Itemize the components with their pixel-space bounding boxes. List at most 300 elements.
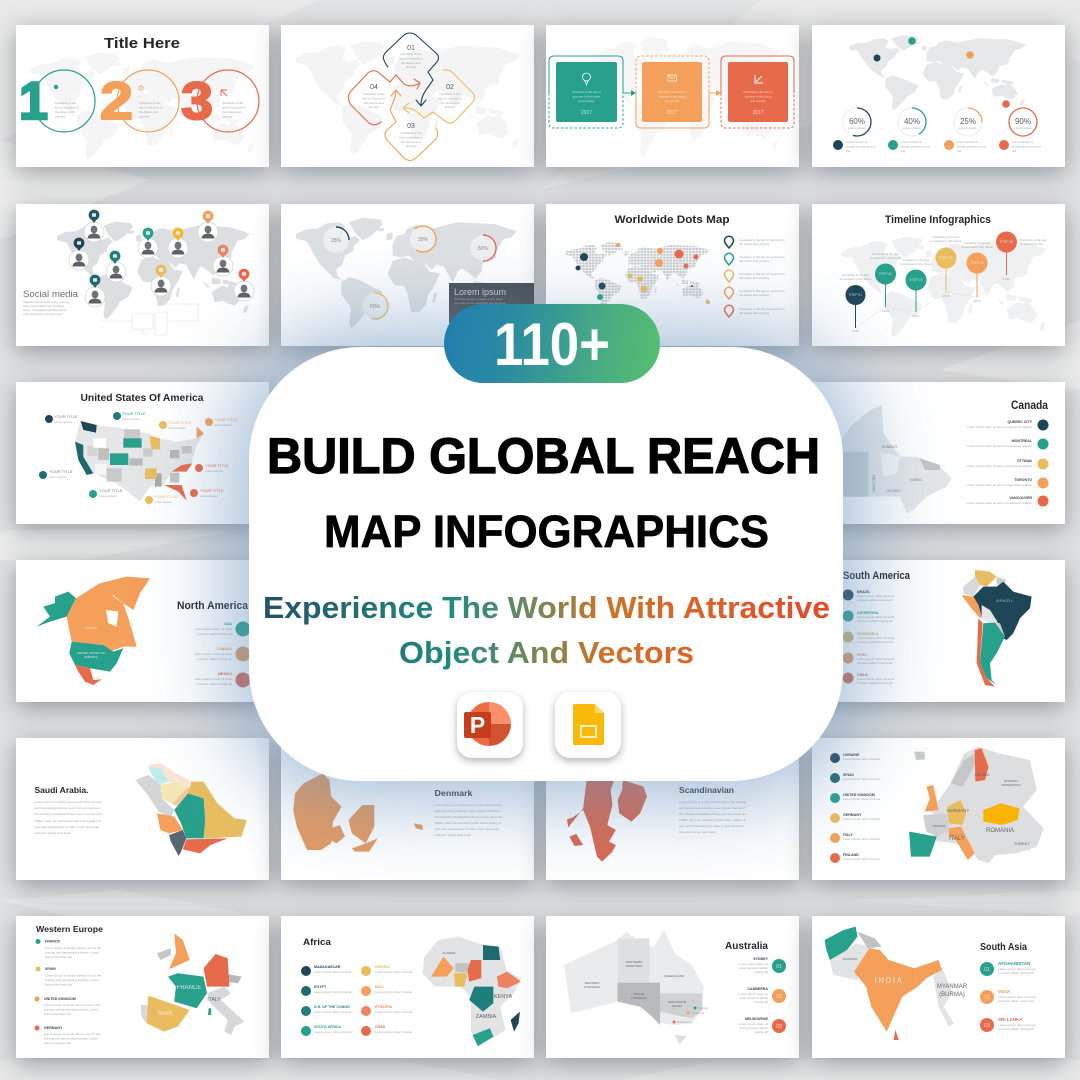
state callouts: Lorem ipsum	[99, 494, 117, 498]
list: Lorem ipsum dolor sit amet	[857, 636, 894, 640]
panel: four step diamond cycle	[281, 25, 534, 167]
diamond labels: the future and	[440, 101, 460, 105]
city list: MONTREAL	[1012, 439, 1033, 443]
box 1 teal	[549, 56, 636, 128]
state callouts: YOUR TITLE	[122, 411, 146, 416]
box 1 teal: 2017	[581, 110, 592, 116]
map labels	[872, 445, 924, 493]
diamond labels: primary	[406, 144, 417, 148]
country list: Lorem ipsum dolor sit amet	[314, 1010, 351, 1014]
body text: and typesetting industry. Lorem Ipsum has been	[434, 809, 501, 813]
city list: Lorem ipsum dolor sit	[738, 992, 768, 996]
map labels: NORTHERN	[626, 960, 642, 964]
panel: map with circular stats	[281, 204, 534, 346]
country list: UNITED KINGDOM	[843, 793, 875, 797]
balloon markers: to success in the future	[900, 262, 932, 266]
country list: Lorem ipsum dolor sit amet	[843, 797, 880, 801]
diamond labels	[362, 45, 462, 148]
diamond 03	[385, 90, 438, 160]
country list: AFGHANISTAN	[998, 961, 1030, 966]
box 3 red	[721, 56, 794, 128]
state callouts: Lorem ipsum	[154, 500, 172, 504]
balloon markers: to success in the future	[961, 245, 993, 249]
state callouts: Lorem ipsum	[122, 417, 140, 421]
ring 30 percent	[405, 221, 441, 257]
country list: Lorem ipsum dolor sit amet	[843, 837, 880, 841]
map labels	[442, 951, 512, 1020]
map labels: SOUTH	[634, 992, 644, 996]
list: BRAZIL	[857, 590, 871, 594]
list: consetur adipis mising elit	[857, 681, 893, 685]
city list: TORONTO	[1014, 478, 1032, 482]
body text: Lorem Ipsum is simply dummy text of the printing	[679, 800, 747, 804]
social media text: a as vincenda eros sunt quis	[23, 312, 63, 316]
country list: Lorem ipsum dolor sit amet,	[998, 967, 1036, 971]
list: consetur adipis mising elit	[197, 682, 232, 686]
balloon markers: Creativity is the key	[903, 258, 930, 262]
body text	[34, 800, 103, 835]
body text: unknown printer took book	[34, 831, 71, 835]
map labels: CANADA	[85, 626, 97, 630]
legend row: the	[846, 149, 851, 153]
diamond labels: Creativity is the	[439, 92, 461, 96]
map labels: MYANMAR	[937, 984, 968, 990]
subtitle line 2: Object And Vectors	[399, 635, 694, 670]
panel: social media map	[16, 204, 269, 346]
map labels: AMERICA	[84, 655, 98, 659]
map labels: QUEENSLAND	[664, 974, 685, 978]
legend row: Lorem ipsum is	[1012, 140, 1033, 144]
map labels	[584, 960, 686, 1008]
country list: ITALY	[843, 833, 853, 837]
map labels: ROMANIA	[986, 828, 1014, 834]
heading: western europe: Western Europe	[36, 924, 103, 934]
legend row: the	[901, 149, 906, 153]
city list: Lorem ipsum dolor sit amet, consectetur adipisc	[966, 464, 1032, 468]
state callouts: Lorem ipsum	[200, 494, 218, 498]
city list: 02	[776, 994, 782, 1000]
country list: Lorem ipsum dolor sit amet	[375, 1030, 412, 1034]
body text: unknown printer took book	[434, 833, 471, 837]
balloon markers: to success in the	[1020, 242, 1043, 246]
heading: africa: Africa	[303, 937, 332, 948]
step 1: the future and	[55, 110, 74, 114]
legend row: Lorem ipsum is	[846, 140, 867, 144]
city list: Lorem ipsum dolor sit amet, consectetur adipisc	[966, 483, 1032, 487]
panel: three year process boxes	[546, 25, 799, 167]
body text: type and scrambled it to make a type specimen	[34, 825, 99, 829]
dark callout box: Lorem ipsum	[454, 287, 506, 297]
panel: australia	[546, 916, 799, 1058]
map labels: PAKISTAN	[843, 957, 857, 961]
diamond labels: key to success in	[399, 136, 423, 140]
map labels: NEW SOUTH	[668, 1000, 686, 1004]
list: GERMANY	[44, 1026, 63, 1030]
step 2	[100, 70, 179, 132]
legend row: Lorem ipsum is	[901, 140, 922, 144]
step 2: primary	[139, 114, 150, 118]
ring 40 percent	[898, 108, 926, 136]
social media text: amet, consequam adipiscing ex	[23, 308, 67, 312]
list: consetur adipis mising elit	[197, 632, 232, 636]
list: consetur adipis mising elit	[857, 619, 893, 623]
country list: Lorem ipsum dolor sit amet	[314, 990, 351, 994]
list: Ipsum has been the	[44, 1041, 71, 1045]
ring 25 percent	[323, 227, 349, 253]
panel: africa	[281, 916, 534, 1058]
country list: UKRAINE	[843, 753, 860, 757]
list	[195, 622, 250, 688]
legend row: simply dummy text of	[957, 144, 986, 148]
country list: SOUTH AFRICA	[314, 1025, 341, 1029]
city list: mising elit	[754, 1000, 768, 1004]
balloon markers: Creativity is the key	[842, 273, 869, 277]
coloured map bubbles	[576, 243, 710, 304]
step 2: key to success in	[139, 106, 163, 110]
country list	[301, 965, 412, 1036]
body text: unknown printer took book	[679, 830, 716, 834]
connector line	[855, 275, 1007, 328]
icon: google slides	[555, 692, 621, 758]
balloon markers: STEP 04	[939, 256, 953, 260]
country list: D.R. OF THE CONGO	[314, 1005, 350, 1009]
country list: FINLAND	[843, 853, 859, 857]
social pins and avatars	[69, 210, 254, 307]
state callouts: Lorem ipsum	[214, 423, 232, 427]
diamond 04	[348, 71, 420, 125]
heading: australia: Australia	[725, 941, 768, 952]
scandinavia map	[567, 780, 647, 862]
balloon markers: Creativity is the key	[964, 241, 991, 245]
body text: the industry's standard dummy text ever since the	[434, 815, 503, 819]
dark callout box: you want to be, anywhere and anytime	[454, 301, 506, 305]
country list: Lorem ipsum dolor sit amet	[314, 1030, 351, 1034]
map labels: TURKEY	[1014, 841, 1030, 846]
map labels: GERMANY	[947, 808, 969, 813]
city list: Lorem ipsum dolor sit	[738, 1022, 768, 1026]
heading: south asia: South Asia	[980, 942, 1027, 953]
box 2 orange	[636, 56, 721, 128]
list: Lorem ipsum dolor sit amet	[195, 677, 232, 681]
denmark map	[293, 773, 423, 852]
state callouts: Lorem ipsum	[168, 426, 186, 430]
state callouts: YOUR TITLE	[214, 417, 238, 422]
box 2 orange: Creativity is the key to	[657, 90, 687, 94]
ring 90 percent: 90%	[1015, 117, 1031, 126]
country list: GERMANY	[843, 813, 862, 817]
panel: south asia	[812, 916, 1065, 1058]
list: Lorem Ipsum is simply dummy text of the	[45, 946, 102, 950]
map labels: WALES	[672, 1004, 682, 1008]
diamond labels: key to success in	[438, 96, 462, 100]
ring 30 percent: 30%	[418, 237, 429, 243]
pin legend: the future and primary	[739, 242, 770, 246]
diamond labels: 04	[370, 84, 378, 91]
pin legend: Creativity is the key to success in	[739, 255, 785, 259]
map labels: QUEBEC	[909, 478, 924, 482]
city list: amet consetur adipin	[739, 1026, 768, 1030]
list: Lorem Ipsum is simply dummy text of the	[44, 1003, 101, 1007]
australia map	[564, 930, 704, 1044]
body text: and typesetting industry. Lorem Ipsum has been	[34, 806, 101, 810]
map labels: AUSTRALIA	[631, 996, 647, 1000]
step 3: Creativity is the	[222, 101, 243, 105]
pin legend: Creativity is the key to success in	[739, 289, 785, 293]
panel: western europe	[16, 916, 269, 1058]
balloon markers: STEP 05	[970, 261, 984, 265]
legend row: simply dummy text of	[846, 144, 875, 148]
map labels: (BURMA)	[939, 992, 965, 998]
country list: consetur adipin mising elit	[998, 971, 1034, 975]
city list: Lorem ipsum dolor sit	[738, 962, 768, 966]
country list: SPAIN	[843, 773, 854, 777]
country list	[830, 753, 880, 863]
country list: NIGERIA	[375, 965, 390, 969]
list: Ipsum has been the	[44, 1012, 71, 1016]
badge: 110+ pill: 110+	[494, 311, 610, 378]
diamond labels: key to success in	[399, 56, 423, 60]
state callouts: Lorem ipsum	[49, 475, 67, 479]
map labels: ONTARIO	[886, 489, 901, 493]
list: Lorem ipsum dolor sit amet	[195, 652, 232, 656]
panel: saudi arabia	[16, 738, 269, 880]
social media text: tetur consectetur hac volutpat	[23, 304, 64, 308]
device outlines	[98, 304, 198, 335]
country list: consetur adipin mising elit	[998, 1027, 1034, 1031]
panel: timeline infographics	[812, 204, 1065, 346]
city list: 01	[776, 964, 782, 970]
ring 60 percent: Lorem ipsum	[848, 126, 866, 130]
western europe map	[141, 933, 244, 1035]
diamond labels: key to success in	[362, 96, 386, 100]
list: MEXICO	[218, 672, 232, 676]
country list: Lorem ipsum dolor sit amet	[314, 970, 351, 974]
icon: powerpoint: P	[470, 712, 485, 738]
map labels: UNITED STATES OF	[77, 651, 105, 655]
country list: Lorem ipsum dolor sit amet	[843, 817, 880, 821]
state callouts: Lorem ipsum	[54, 420, 72, 424]
pin legend: the future and primary	[739, 293, 770, 297]
box 2 orange: success in the future	[658, 94, 686, 98]
city list: CANBERRA	[747, 987, 768, 991]
diamond labels: the future and	[401, 140, 421, 144]
map markers	[874, 37, 1010, 108]
city pins: Melbourne	[677, 1020, 692, 1024]
south asia map	[825, 927, 954, 1040]
box 2 orange: and primary	[664, 99, 680, 103]
list: Lorem Ipsum is simply dummy text of the	[44, 1032, 101, 1036]
box 1 teal: and primary	[579, 99, 595, 103]
list: SPAIN	[45, 967, 56, 971]
panel: map with percentage rings	[812, 25, 1065, 167]
pin legend	[724, 236, 785, 317]
balloon markers: STEP 03	[909, 278, 923, 282]
ring 25 percent: 25%	[960, 117, 976, 126]
africa map	[423, 937, 521, 1047]
list: Lorem ipsum dolor sit amet	[857, 615, 894, 619]
city list: Lorem ipsum dolor sit amet, consectetur adipisc	[966, 425, 1032, 429]
step 3: the future and	[222, 110, 241, 114]
map labels: KENYA	[494, 994, 512, 1000]
ring 50 percent: 50%	[478, 246, 489, 252]
body text: Lorem Ipsum is simply dummy text of the printing	[434, 803, 502, 807]
city list	[966, 420, 1048, 506]
step 1: key to success in	[55, 106, 79, 110]
panel: worldwide dots map	[546, 204, 799, 346]
country list: CHAD	[375, 1025, 386, 1029]
panel: title here 1 2 3	[16, 25, 269, 167]
list: USA	[224, 622, 232, 626]
list	[34, 939, 102, 1045]
ring 25 percent	[954, 108, 982, 136]
box 3 red: Creativity is the key to	[743, 90, 773, 94]
state callouts: YOUR TITLE	[54, 414, 78, 419]
state callouts: YOUR TITLE	[168, 420, 192, 425]
body text: Lorem Ipsum is simply dummy text of the printing	[34, 800, 102, 804]
city pins: Sydney	[698, 1006, 709, 1010]
state callouts: YOUR TITLE	[99, 488, 123, 493]
ring 90 percent: Lorem ipsum	[1014, 126, 1032, 130]
map labels: ITALY	[949, 836, 965, 842]
map labels	[77, 626, 105, 659]
body text: type and scrambled it to make a type specimen	[434, 827, 499, 831]
country list: Lorem ipsum dolor sit amet	[843, 777, 880, 781]
list: Lorem ipsum dolor sit amet	[857, 657, 894, 661]
pin legend: the future and primary	[739, 311, 770, 315]
balloon markers: to success in the future	[840, 277, 872, 281]
city list: VANCOUVER	[1009, 496, 1032, 500]
city list: MELBOURNE	[745, 1017, 769, 1021]
step 3: 3	[181, 72, 213, 131]
box 3 red: success in the future	[744, 94, 772, 98]
box 2 orange: 2017	[666, 110, 678, 116]
country list: Lorem ipsum dolor sit amet,	[998, 1023, 1036, 1027]
center panel: white rounded card	[249, 347, 843, 781]
box 3 red: and primary	[750, 99, 766, 103]
panel: canada	[812, 382, 1065, 524]
country list: consetur adipin mising elit	[998, 999, 1034, 1003]
heading: timeline infographics: Timeline Infographics	[885, 214, 991, 226]
body text: 1500s, when an unknown printer took a galley of	[34, 819, 101, 823]
icon: powerpoint	[457, 692, 523, 758]
diamond labels: the future and	[401, 61, 421, 65]
list: printing and typesetting industry. Lorem	[44, 1036, 98, 1040]
body text	[434, 803, 503, 837]
heading: map infographics: MAP INFOGRAPHICS	[324, 506, 769, 557]
country list: Lorem ipsum dolor sit amet,	[998, 995, 1036, 999]
body text: 1500s, when an unknown printer took a galley of	[434, 821, 501, 825]
social media text	[23, 289, 78, 316]
list: FRANCE	[45, 940, 61, 944]
map labels: ITALY	[207, 997, 221, 1003]
list: Ipsum has been the	[45, 955, 72, 959]
city list: OTTAWA	[1017, 459, 1032, 463]
diamond labels: the future and	[364, 101, 384, 105]
country list: INDIA	[998, 989, 1011, 994]
city list: SYDNEY	[753, 957, 769, 961]
social media text: Aliquam ipsum sunt amet, con es	[23, 300, 69, 304]
state callouts: YOUR TITLE	[200, 488, 224, 493]
city list: mising elit	[754, 970, 768, 974]
country list: Lorem ipsum dolor sit amet	[375, 1010, 412, 1014]
ring 50 percent	[470, 235, 496, 261]
heading: build global reach: BUILD GLOBAL REACH	[267, 428, 820, 484]
legend row	[833, 140, 1041, 153]
list: Lorem ipsum dolor sit amet	[195, 627, 232, 631]
step 1: primary	[55, 114, 66, 118]
city list: amet consetur adipin	[739, 996, 768, 1000]
balloon markers: 2017	[913, 314, 920, 318]
list: consetur adipis mising elit	[857, 640, 893, 644]
step 1: Creativity is the	[55, 101, 76, 105]
north america map	[37, 577, 150, 685]
city list: 03	[776, 1024, 782, 1030]
state callouts: YOUR TITLE	[154, 494, 178, 499]
country list: ETHIOPIA	[375, 1005, 392, 1009]
country list: EGYPT	[314, 985, 327, 989]
panel: south america	[812, 560, 1065, 702]
box 1 teal: success in the future	[573, 94, 601, 98]
map labels	[933, 773, 1030, 846]
state callouts	[39, 411, 238, 504]
legend row: simply dummy text of	[1012, 144, 1041, 148]
list: Ipsum has been the	[45, 982, 72, 986]
map labels: WESTERN	[584, 981, 600, 985]
map labels: TERRITORY	[625, 964, 643, 968]
city list: QUEBEC CITY	[1007, 420, 1033, 424]
list: consetur adipis mising elit	[857, 661, 893, 665]
map labels: ALGERIA	[442, 951, 456, 955]
panel: united states of america	[16, 382, 269, 524]
country list	[980, 961, 1036, 1032]
legend row: simply dummy text of	[901, 144, 930, 148]
map labels: FRANCE	[177, 985, 201, 991]
map labels: FINLAND	[975, 773, 990, 777]
step 2: the future and	[139, 110, 158, 114]
country list: Lorem ipsum dolor sit amet	[843, 757, 880, 761]
legend row: the	[957, 149, 962, 153]
ring 60 percent	[843, 108, 871, 136]
map labels: FRANCE	[933, 824, 945, 828]
list: Lorem ipsum dolor sit amet	[857, 677, 894, 681]
legend row: Lorem ipsum is	[957, 140, 978, 144]
map labels: NUNAVUT	[882, 445, 898, 449]
pin legend: the future and primary	[739, 276, 770, 280]
city pins: Canberra	[691, 1011, 704, 1015]
map labels: ZAMBIA	[476, 1014, 497, 1020]
pin legend: Creativity is the key to success in	[739, 238, 785, 242]
list: printing and typesetting industry. Lorem	[45, 978, 99, 982]
step 2: Creativity is the	[139, 101, 160, 105]
state callouts: YOUR TITLE	[205, 463, 229, 468]
list: ARGENTINA	[857, 611, 879, 615]
state callouts: Lorem ipsum	[205, 469, 223, 473]
diamond 02	[403, 70, 474, 123]
body text: and typesetting industry. Lorem Ipsum has been	[679, 806, 745, 810]
map labels: RUSSIAN	[1004, 779, 1018, 783]
dark callout box: We have people in place every place	[454, 297, 503, 301]
step 1	[19, 70, 95, 132]
country list: Lorem ipsum dolor sit amet	[375, 970, 412, 974]
ring 25 percent: Lorem ipsum	[959, 126, 977, 130]
country list: MALI	[375, 985, 384, 989]
heading: north america: North America	[177, 600, 249, 612]
list: VENEZUELA	[857, 632, 879, 636]
balloon markers: to success in the future	[930, 239, 962, 243]
heading: worldwide dots map: Worldwide Dots Map	[614, 214, 730, 226]
body text: 1500s, when an unknown printer took a galley of	[679, 818, 746, 822]
dark callout box	[449, 283, 534, 323]
